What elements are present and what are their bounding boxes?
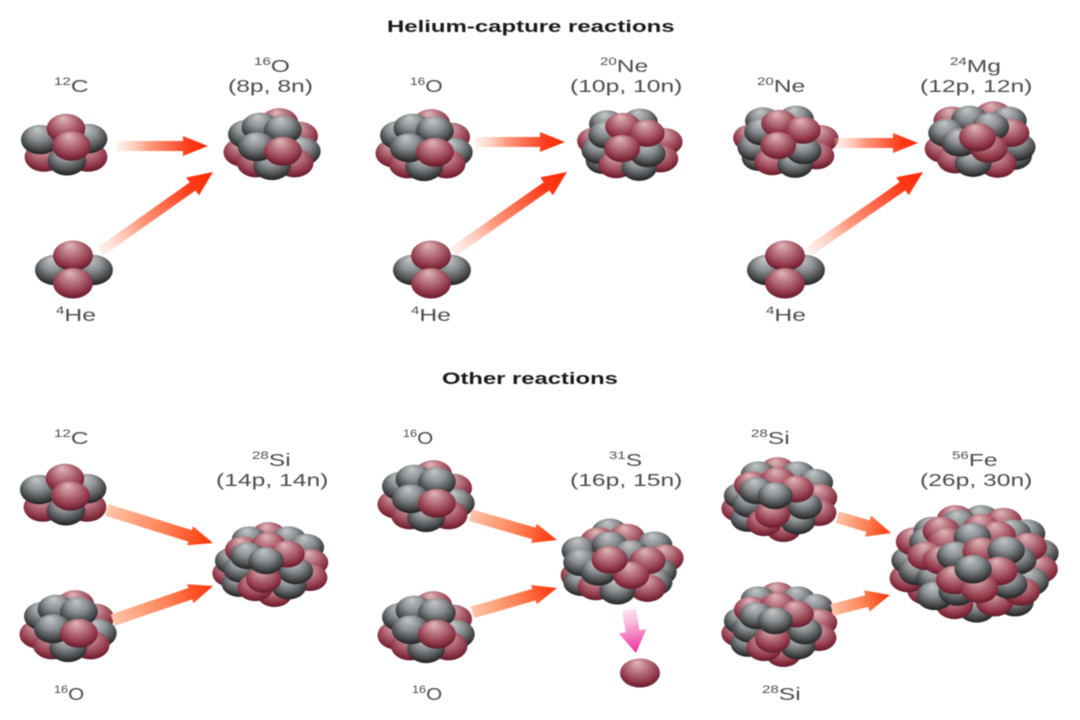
arrow: proton emission <box>615 607 650 655</box>
label: oxygen-16 upper: O <box>417 428 433 449</box>
arrow: upper silicon to iron <box>834 507 894 544</box>
nucleus: oxygen-16 lower <box>378 591 475 663</box>
nucleus: silicon-28 upper <box>721 457 837 542</box>
arrow: oxygen to neon <box>475 132 565 152</box>
label: silicon-28 lower: Si <box>779 683 801 704</box>
label: helium-4: He <box>64 304 96 325</box>
panel: carbon plus oxygen gives silicon <box>19 427 328 705</box>
label: silicon-28 upper: Si <box>768 427 790 448</box>
nucleus: iron-56 product <box>890 505 1059 623</box>
panel: carbon plus helium gives oxygen <box>21 55 321 325</box>
nucleus: sulfur-31 product <box>561 519 684 605</box>
label: iron-56 product: Fe <box>969 449 998 470</box>
label: silicon-28 lower: 28 <box>762 683 779 696</box>
label: oxygen-16: O <box>68 684 84 705</box>
heading: helium-capture reactions: Helium-capture reactions <box>387 17 675 36</box>
label: oxygen composition: (8p, 8n) <box>228 75 313 96</box>
label: silicon-28 upper: 28 <box>751 427 768 440</box>
label: neon-20 product: 20 <box>600 55 617 68</box>
arrow: helium to neon <box>447 163 573 261</box>
nucleus: silicon-28 product <box>212 522 328 607</box>
label: silicon-28 product: 28 <box>252 449 269 462</box>
nucleus: carbon-12 <box>20 464 106 525</box>
label: oxygen-16: O <box>425 77 443 96</box>
label: iron-56 product: 56 <box>952 449 969 462</box>
arrow: lower silicon to iron <box>829 584 893 621</box>
label: neon-20 product: Ne <box>617 55 648 76</box>
label: helium-4: He <box>774 304 806 325</box>
arrow: carbon to silicon <box>104 500 216 553</box>
nucleus: carbon-12 <box>21 114 107 175</box>
heading: other reactions: Other reactions <box>442 369 618 388</box>
arrow: oxygen to silicon <box>109 577 216 630</box>
label: magnesium composition: (12p, 12n) <box>920 75 1032 96</box>
label: neon-20: Ne <box>774 75 805 96</box>
label: silicon composition: (14p, 14n) <box>216 469 328 490</box>
panel: silicon plus silicon gives iron <box>721 427 1059 704</box>
arrow: carbon to oxygen <box>117 136 208 156</box>
nucleus: silicon-28 lower <box>721 582 837 667</box>
arrow: helium to magnesium <box>802 163 929 261</box>
nucleus: magnesium-24 product <box>925 101 1036 178</box>
label: oxygen-16 upper: 16 <box>403 427 417 440</box>
nucleus: helium-4 <box>393 241 471 298</box>
label: helium-4: 4 <box>766 304 774 317</box>
label: oxygen-16: 16 <box>54 683 68 696</box>
emitted proton <box>620 658 660 688</box>
label: magnesium-24 product: 24 <box>950 55 967 68</box>
nucleus: oxygen-16 <box>376 109 473 181</box>
label: helium-4: 4 <box>56 304 64 317</box>
label: sulfur composition: (16p, 15n) <box>570 469 682 490</box>
label: sulfur-31 product: S <box>626 449 642 470</box>
label: carbon-12: 12 <box>54 427 71 440</box>
label: carbon-12: 12 <box>54 75 71 88</box>
arrow: upper oxygen to sulfur <box>468 506 560 550</box>
label: helium-4: 4 <box>411 304 419 317</box>
arrow: helium to oxygen <box>94 163 219 261</box>
nucleus: neon-20 <box>733 106 839 178</box>
label: helium-4: He <box>419 304 451 325</box>
label: neon-20: 20 <box>757 75 774 88</box>
nucleus: helium-4 <box>35 241 113 298</box>
panel: oxygen plus helium gives neon <box>376 55 683 325</box>
label: oxygen-16 product: 16 <box>254 55 271 68</box>
label: iron composition: (26p, 30n) <box>920 469 1032 490</box>
label: sulfur-31 product: 31 <box>609 449 626 462</box>
label: oxygen-16 product: O <box>271 55 290 76</box>
panel: neon plus helium gives magnesium <box>733 55 1036 325</box>
label: magnesium-24 product: Mg <box>967 55 1001 76</box>
label: oxygen-16 lower: O <box>426 684 442 705</box>
nucleus: oxygen-16 <box>19 590 117 662</box>
panel: oxygen plus oxygen gives sulfur <box>378 427 684 705</box>
nucleus: helium-4 <box>747 241 825 298</box>
label: neon composition: (10p, 10n) <box>570 75 682 96</box>
label: oxygen-16 lower: 16 <box>412 683 426 696</box>
label: carbon-12: C <box>71 75 89 96</box>
nucleus: oxygen-16 product <box>224 108 321 180</box>
nucleus: neon-20 product <box>577 109 683 181</box>
arrow: lower oxygen to sulfur <box>470 578 560 622</box>
arrow: neon to magnesium <box>835 133 918 153</box>
label: carbon-12: C <box>71 427 89 448</box>
label: silicon-28 product: Si <box>269 449 291 470</box>
label: oxygen-16: 16 <box>410 75 425 88</box>
nucleus: oxygen-16 upper <box>378 460 475 532</box>
